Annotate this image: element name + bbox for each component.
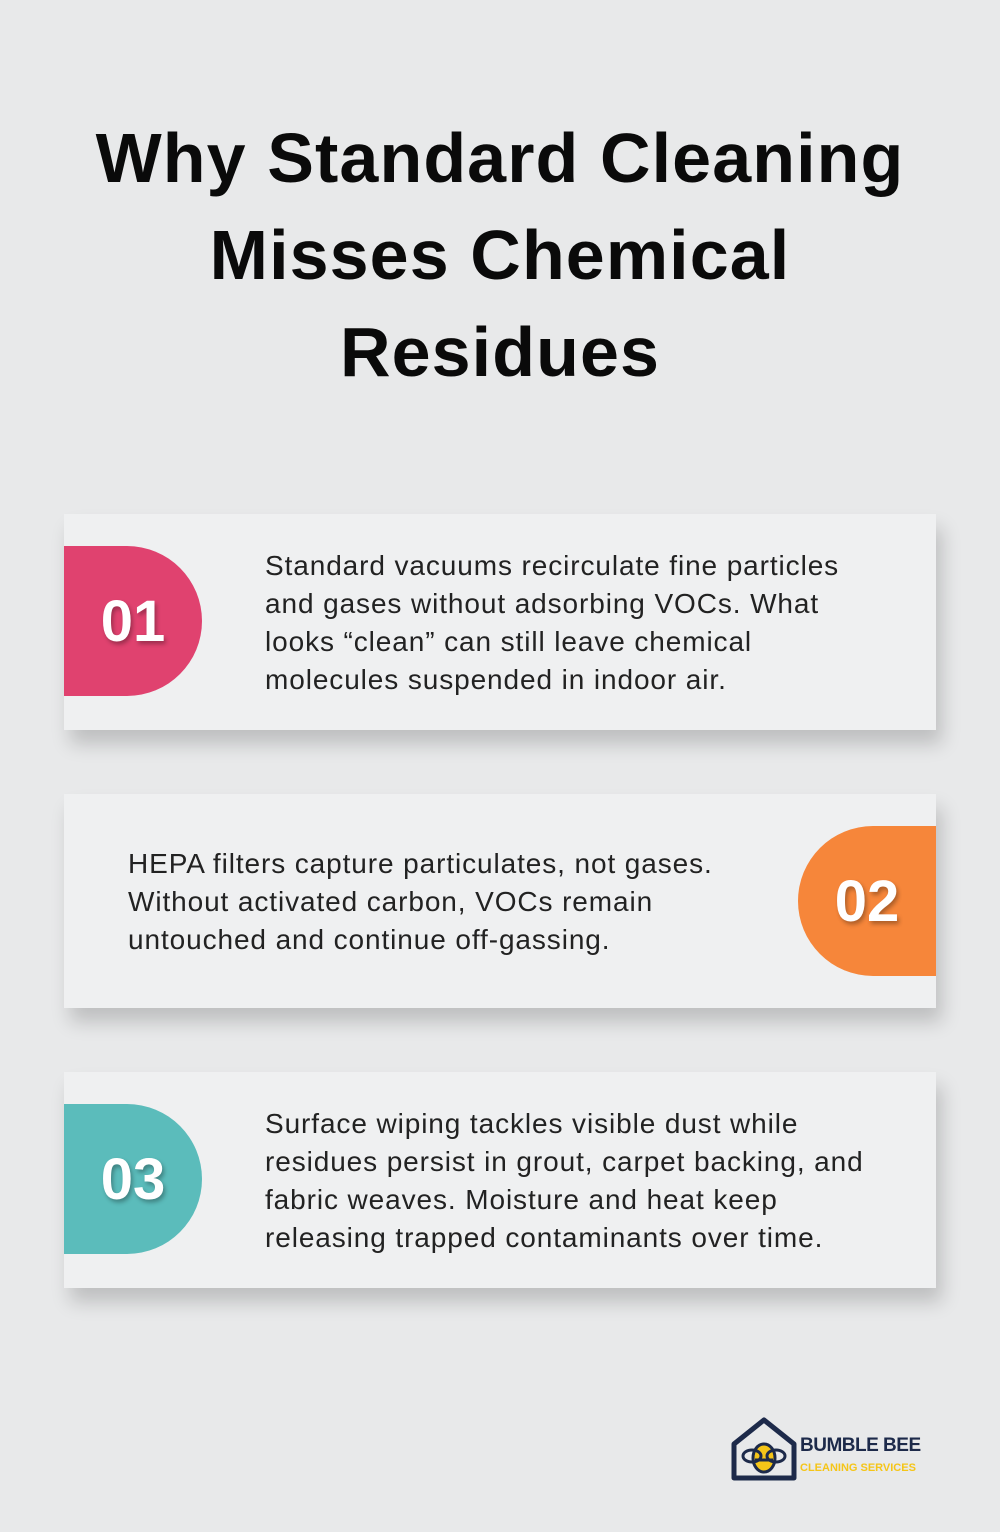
panel: card 3 xyxy=(64,1072,936,1288)
badge 01: 01 xyxy=(101,588,165,654)
panel: card 1 xyxy=(64,514,936,730)
text 3: residues persist in grout, carpet backing, and xyxy=(265,1146,864,1177)
badge 02: 02 xyxy=(835,868,899,934)
text 2: HEPA filters capture particulates, not gases. xyxy=(128,848,713,879)
text 3 xyxy=(265,1108,864,1253)
text 1: molecules suspended in indoor air. xyxy=(265,664,727,695)
text 3: Surface wiping tackles visible dust while xyxy=(265,1108,798,1139)
title xyxy=(96,119,904,391)
text 3: fabric weaves. Moisture and heat keep xyxy=(265,1184,778,1215)
logo text: BUMBLE BEE xyxy=(800,1435,921,1456)
icon: bee house xyxy=(732,1417,796,1480)
text 1: Standard vacuums recirculate fine particles xyxy=(265,550,839,581)
text 3: releasing trapped contaminants over time. xyxy=(265,1222,823,1253)
logo text: CLEANING SERVICES xyxy=(800,1462,916,1474)
title: Residues xyxy=(340,313,660,391)
panel: card 2 xyxy=(64,794,936,1008)
badge 01 xyxy=(64,546,202,696)
title: Why Standard Cleaning xyxy=(96,119,904,197)
text 1 xyxy=(265,550,839,695)
text 2: untouched and continue off-gassing. xyxy=(128,924,610,955)
logo text xyxy=(800,1435,921,1474)
badge 02 xyxy=(798,826,936,976)
badge 03 xyxy=(64,1104,202,1254)
text 2 xyxy=(128,848,713,955)
text 2: Without activated carbon, VOCs remain xyxy=(128,886,653,917)
logo xyxy=(732,1417,921,1480)
text 1: and gases without adsorbing VOCs. What xyxy=(265,588,819,619)
text 1: looks “clean” can still leave chemical xyxy=(265,626,752,657)
title: Misses Chemical xyxy=(210,216,790,294)
badge 03: 03 xyxy=(101,1146,165,1212)
